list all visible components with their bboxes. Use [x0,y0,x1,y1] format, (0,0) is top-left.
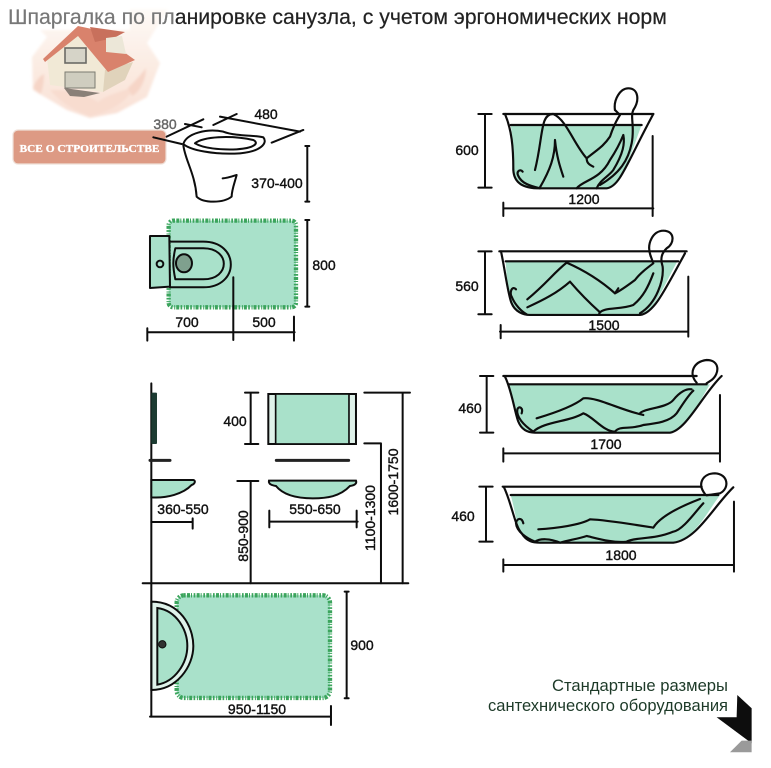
hands [32,9,168,118]
dim 380: 380 [153,116,177,132]
panel: toilet [147,106,336,341]
dim 370-400: 370-400 [251,175,303,191]
panel: sink and mirror [143,383,410,725]
dim 460: 460 [458,400,482,416]
dim 800: 800 [312,257,336,273]
dim 480: 480 [254,106,278,122]
dim 400: 400 [223,413,247,429]
dim 700: 700 [175,314,199,330]
badge: ВСЕ О СТРОИТЕЛЬСТВЕ [20,144,160,155]
dim 600: 600 [455,142,479,158]
dim 900: 900 [350,637,374,653]
dim 1700: 1700 [590,436,622,452]
caption [488,677,728,715]
dim 1500: 1500 [588,317,620,333]
bath drawing [480,360,722,462]
title: Шпаргалка по планировке санузла, с учетом эргономических норм [8,5,667,29]
dim 460: 460 [451,508,475,524]
dim 500: 500 [252,314,276,330]
dim 1600-1750: 1600-1750 [385,448,401,515]
arrow [717,695,752,752]
caption: сантехнического оборудования [488,697,728,715]
sink drawing [143,383,410,725]
bath drawing [478,88,653,216]
house [43,26,135,97]
panel: bathtub 1800 [451,473,734,572]
dim 950-1150: 950-1150 [228,701,286,717]
dim 550-650: 550-650 [289,501,341,517]
panel: bathtub 1700 [458,360,722,462]
toilet side view [153,114,309,202]
dim 850-900: 850-900 [235,510,251,562]
dim 1200: 1200 [568,191,600,207]
dim 360-550: 360-550 [157,501,209,517]
bath drawing [478,231,688,338]
dim 1100-1300: 1100-1300 [362,485,378,551]
panel: bathtub 1500 [455,231,688,338]
watermark: house in hands [32,9,168,118]
dim 1800: 1800 [605,547,637,563]
bath drawing [479,473,734,572]
dim 560: 560 [455,278,479,294]
toilet plan with rug [147,220,309,341]
caption: Стандартные размеры [552,677,728,695]
badge [13,130,166,164]
panel: bathtub 1200 [455,88,653,216]
